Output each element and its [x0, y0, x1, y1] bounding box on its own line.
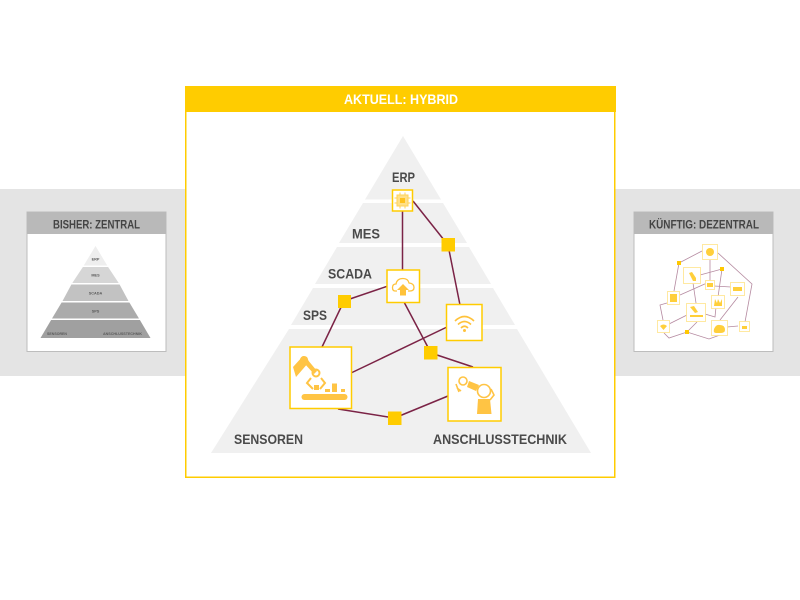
main pyramid	[211, 136, 591, 453]
heading: kuenftig dezentral: KÜNFTIG: DEZENTRAL	[649, 218, 759, 232]
pyramid level labels	[234, 169, 567, 447]
small pyramid: ANSCHLUSSTECHNIK	[103, 332, 142, 336]
panel: bisher zentral	[0, 189, 186, 376]
heading: bisher zentral: BISHER: ZENTRAL	[53, 220, 140, 232]
small pyramid: ERP	[92, 258, 100, 262]
pyramid level labels: SCADA	[328, 266, 372, 282]
small pyramid: MES	[91, 274, 100, 278]
icon: robot arm with conveyor	[290, 347, 352, 408]
pyramid level labels: ERP	[392, 169, 415, 185]
connection nodes	[338, 238, 455, 425]
icon: industrial robot	[448, 368, 501, 421]
card: kuenftig	[634, 212, 773, 352]
small pyramid: SENSOREN	[47, 332, 67, 336]
pyramid level labels: MES	[352, 226, 380, 242]
network connections	[322, 201, 473, 418]
small pyramid	[40, 246, 150, 338]
heading: aktuell hybrid	[185, 86, 616, 112]
panel: aktuell hybrid	[185, 86, 616, 477]
small pyramid: SCADA	[89, 292, 103, 296]
pyramid level labels: SPS	[303, 307, 327, 323]
card: bisher	[27, 212, 166, 352]
small network diagram	[658, 244, 752, 339]
icon: wifi	[446, 304, 482, 340]
panel: kuenftig dezentral	[615, 189, 800, 376]
pyramid level labels: ANSCHLUSSTECHNIK	[433, 431, 567, 447]
icon: chip	[392, 190, 412, 211]
pyramid level labels: SENSOREN	[234, 431, 303, 447]
small pyramid: SPS	[92, 310, 100, 314]
icon: cloud upload	[387, 270, 420, 302]
heading: aktuell hybrid: AKTUELL: HYBRID	[344, 91, 458, 107]
